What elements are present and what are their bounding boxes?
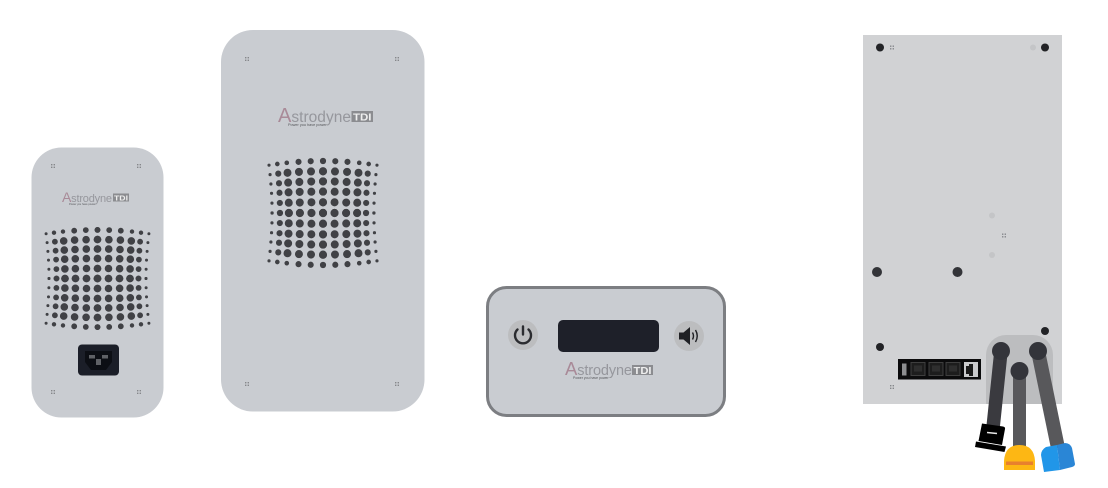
logo: Astrodyne TDI on control panel: TDI bbox=[634, 366, 652, 377]
plug: black bbox=[975, 424, 1006, 452]
faint screws: rear plate bbox=[890, 44, 1036, 389]
logo: Astrodyne TDI on small panel: TDI bbox=[114, 194, 128, 202]
port block bbox=[898, 359, 981, 380]
logo: Astrodyne TDI on large panel: Power you have power bbox=[288, 123, 327, 127]
cable: black connector bbox=[975, 342, 1010, 452]
cable: blue connector bbox=[1029, 342, 1075, 472]
logo: Astrodyne TDI on small panel: Astrodyne bbox=[62, 189, 112, 205]
vent dot grid: large panel bbox=[269, 161, 377, 265]
mounting screws: large panel bbox=[245, 57, 399, 386]
panel: control panel with display bbox=[488, 288, 724, 416]
display screen bbox=[558, 320, 659, 352]
plug: blue bbox=[1041, 443, 1075, 472]
logo: Astrodyne TDI on control panel: Astrodyne bbox=[565, 358, 632, 379]
cable: yellow connector bbox=[1004, 362, 1035, 470]
panel: large front cover bbox=[221, 30, 424, 412]
logo: Astrodyne TDI on control panel: Power you have power bbox=[573, 376, 609, 380]
icon: volume button bbox=[674, 321, 704, 351]
icon: power button bbox=[508, 320, 538, 350]
mounting screws: small panel bbox=[51, 164, 141, 394]
vent dot grid: small panel bbox=[46, 230, 149, 327]
cable housing bbox=[986, 335, 1053, 404]
logo: Astrodyne TDI on large panel: Astrodyne bbox=[278, 105, 351, 127]
plug: yellow bbox=[1004, 445, 1035, 470]
logo: Astrodyne TDI on small panel: Power you have power bbox=[69, 202, 96, 206]
logo: Astrodyne TDI on large panel: TDI bbox=[353, 112, 372, 124]
panel: small front cover with power inlet bbox=[32, 148, 164, 418]
mounting holes bbox=[872, 44, 1049, 351]
panel: rear plate bbox=[863, 35, 1062, 404]
icon: power inlet socket bbox=[78, 344, 119, 376]
